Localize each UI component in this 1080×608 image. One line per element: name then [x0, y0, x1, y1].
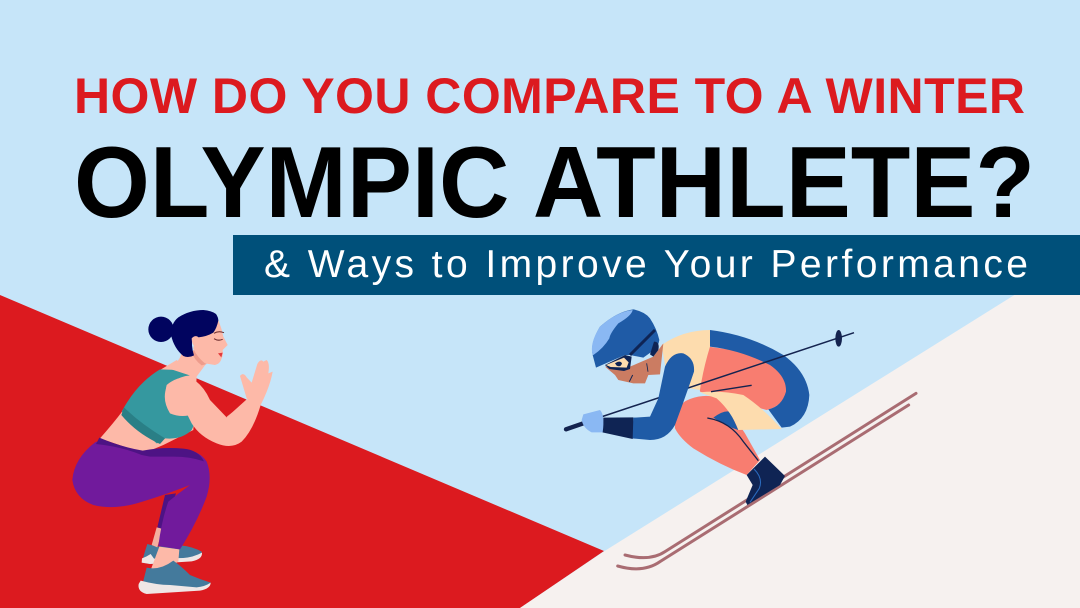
red slope [0, 295, 604, 608]
illustration: woman squatting [72, 310, 273, 594]
skis [618, 393, 916, 569]
back calf skin [152, 527, 163, 547]
leggings waistband [96, 438, 204, 461]
praying hand [240, 360, 273, 405]
hair bun [148, 317, 174, 342]
mouth line [629, 375, 633, 382]
cream chest [662, 330, 710, 390]
front ankle [151, 547, 179, 570]
back shoe [142, 544, 202, 564]
ear [192, 336, 200, 347]
ski pole [565, 330, 854, 429]
glove [582, 410, 603, 432]
body coral [697, 345, 787, 410]
neck line [647, 363, 648, 372]
face [193, 317, 228, 365]
torso [100, 360, 197, 453]
back hand behind [227, 402, 247, 422]
front arm [166, 377, 261, 446]
eyebrow [214, 332, 224, 333]
helmet [592, 309, 659, 368]
lips [218, 353, 223, 357]
neck [167, 350, 206, 377]
snow slope [520, 254, 1080, 608]
front shoe [138, 561, 211, 594]
cream hip [700, 392, 782, 430]
green sports top [121, 369, 195, 444]
goggles [605, 355, 632, 371]
illustration: skier [565, 309, 916, 569]
cuff [602, 417, 633, 439]
subtitle banner [233, 235, 1080, 295]
closed eye [214, 339, 223, 340]
subtitle text: & Ways to Improve Your Performance [264, 243, 1028, 286]
back calf legging [157, 493, 176, 529]
knee patch [713, 411, 738, 430]
hair [171, 310, 218, 357]
far leg and thigh [675, 396, 760, 475]
neck shadow [192, 350, 207, 365]
face [605, 343, 663, 383]
title line 1: HOW DO YOU COMPARE TO A WINTER [74, 68, 1025, 124]
leg detail lines [707, 385, 758, 461]
blue back [710, 330, 809, 428]
arm [632, 353, 694, 440]
leggings [72, 442, 210, 549]
ski boot [746, 457, 785, 505]
title line 2: OLYMPIC ATHLETE? [74, 127, 1035, 239]
